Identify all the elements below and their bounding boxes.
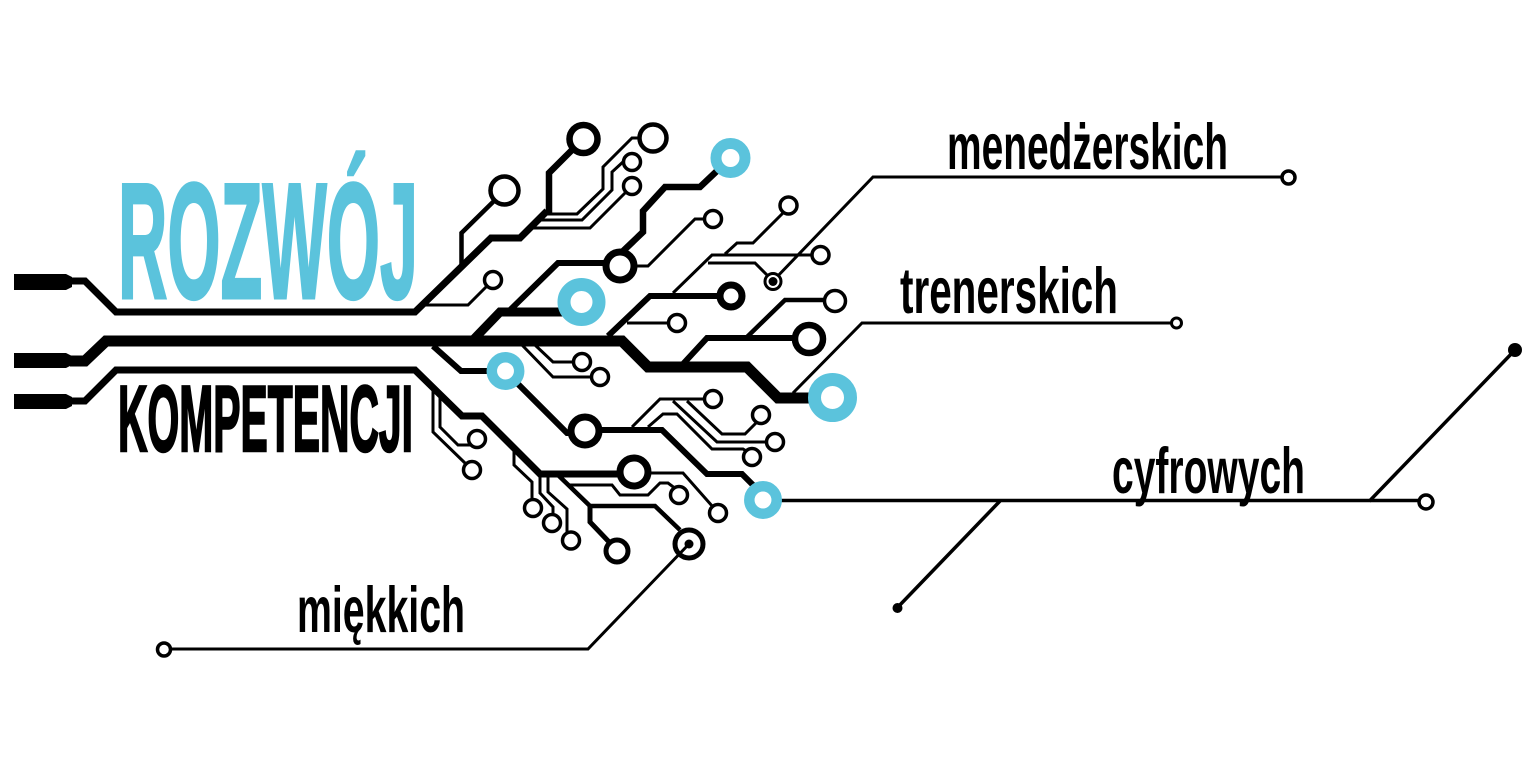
label: cyfrowych: cyfrowych [1112,434,1305,507]
callout: menedżerskich [765,110,1295,290]
callout: cyfrowych [749,343,1522,613]
text: ROZWÓJ [118,149,418,333]
callout: miękkich [158,530,703,656]
connector pins [14,274,72,409]
circuit trace: top branch [70,124,666,312]
text: KOMPETENCJI [118,366,413,471]
label: miękkich: miękkich [297,573,465,646]
callout: trenerskich [793,254,1182,393]
circuit trace: main line [70,144,850,416]
circuit trace: middle lower branch [433,345,784,488]
circuit trace: bottom branch [70,370,726,562]
label: menedżerskich: menedżerskich [947,110,1228,183]
label: trenerskich: trenerskich [900,254,1118,327]
